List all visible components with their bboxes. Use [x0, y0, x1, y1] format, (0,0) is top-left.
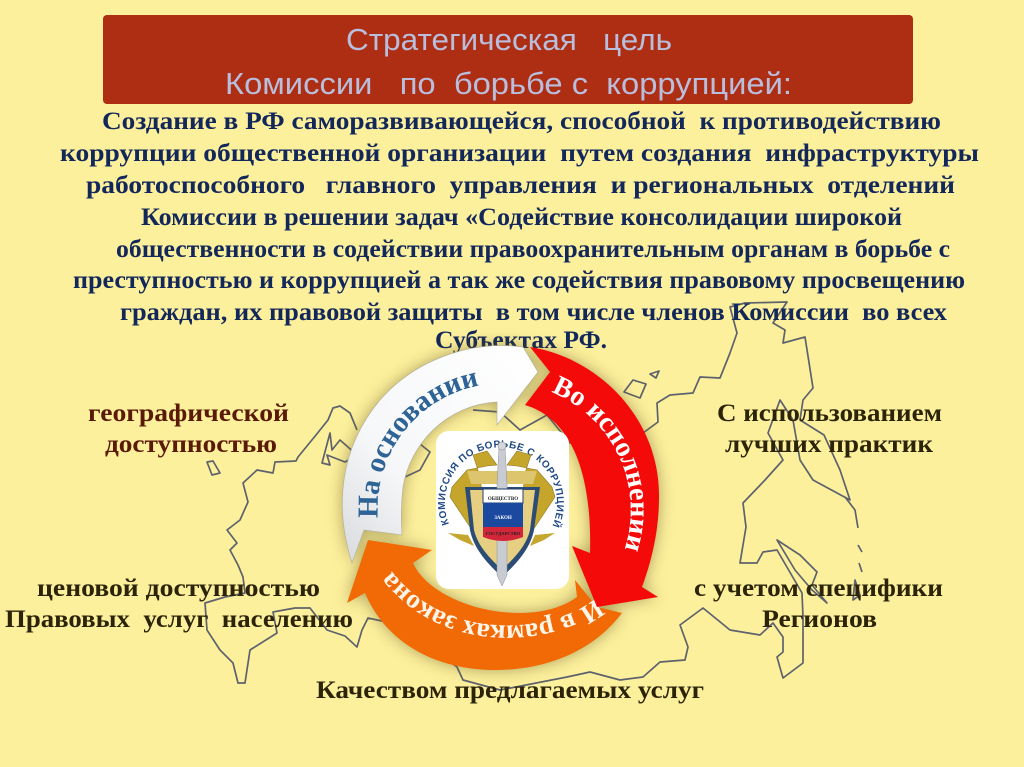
emblem circular text: КОМИССИЯ ПО БОРЬБЕ С КОРРУПЦИЕЙ [438, 440, 564, 528]
main goal text block: Создание в РФ саморазвивающейся, способной к противодействию [102, 106, 941, 135]
main goal text block [60, 106, 979, 354]
emblem flag: ГОСУДАРСТВО [486, 531, 521, 536]
emblem flag: ЗАКОН [494, 516, 512, 521]
title line 1: Стратегическая цель [346, 22, 672, 57]
label: best practices: лучших практик [725, 429, 933, 458]
main goal text block: коррупции общественной организации путем создания инфраструктуры [60, 138, 979, 167]
title line 2: Комиссии по борьбе с коррупцией: [225, 66, 792, 101]
title banner [103, 15, 913, 104]
emblem eagle wings and heads [450, 451, 555, 530]
label: best practices: С использованием [717, 398, 942, 427]
arrow: white, based on [342, 345, 538, 564]
main goal text block: преступностью и коррупцией а так же содействия правовому просвещению [73, 265, 965, 294]
main goal text block: граждан, их правовой защиты в том числе членов Комиссии во всех [120, 297, 947, 326]
map of Russia outline [205, 302, 862, 690]
label: quality of services: Качеством предлагаемых услуг [316, 675, 704, 704]
label: price accessibility [5, 573, 353, 633]
emblem flag: ОБЩЕСТВО [488, 497, 518, 502]
label: geographic accessibility: географической [88, 398, 289, 427]
main goal text block: работоспособного главного управления и региональных отделений [86, 170, 955, 199]
label: geographic accessibility [88, 398, 289, 458]
cycle of arrows [332, 336, 669, 680]
commission emblem [436, 431, 569, 589]
emblem shield [465, 487, 540, 577]
main goal text block: Комиссии в решении задач «Содействие консолидации широкой [141, 202, 902, 231]
arrow: orange, within the law: И в рамках закона [384, 571, 606, 638]
label: regional specifics: Регионов [762, 604, 877, 633]
label: regional specifics [694, 573, 943, 633]
label: best practices [717, 398, 942, 458]
label: geographic accessibility: доступностью [105, 429, 277, 458]
emblem ribbons [448, 533, 555, 546]
emblem sword [497, 447, 507, 586]
main goal text block: Субъектах РФ. [435, 325, 607, 354]
emblem white card [436, 431, 569, 589]
main goal text block: общественности в содействии правоохранительным органам в борьбе с [116, 234, 950, 263]
emblem flag [483, 489, 523, 541]
arrow: orange, within the law [347, 540, 622, 670]
arrow shadows [342, 346, 659, 670]
arrow: red, in execution [525, 347, 659, 607]
arrow: red, in execution: Во исполнении [552, 375, 644, 552]
label: price accessibility: ценовой доступностью [37, 573, 320, 602]
label: regional specifics: с учетом специфики [694, 573, 943, 602]
arrow: white, based on: На основании [358, 372, 478, 518]
label: price accessibility: Правовых услуг населению [5, 604, 353, 633]
